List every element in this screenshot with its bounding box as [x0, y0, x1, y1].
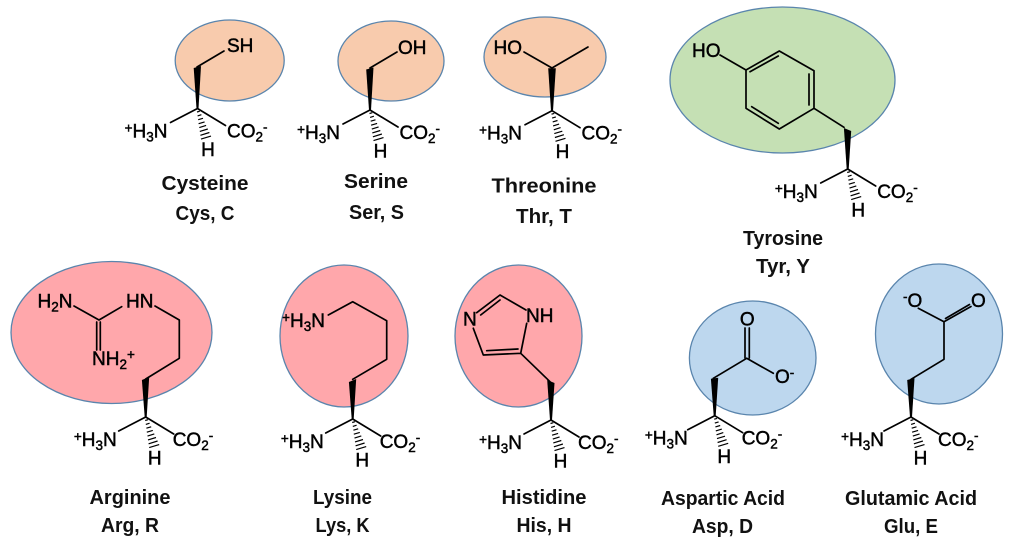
panel: aspartic acid [645, 301, 816, 538]
amino acid backbone: aspartic acid: + [645, 428, 653, 443]
side chain structure: serine: OH [398, 38, 426, 59]
side chain highlight: arginine [11, 262, 212, 404]
amino acid backbone: tyrosine: 2 [906, 190, 913, 205]
amino acid backbone: glutamic acid: - [974, 428, 979, 443]
name label: threonine: Thr, T [516, 206, 572, 228]
name label: cysteine [162, 173, 248, 225]
amino acid backbone: cysteine: 2 [256, 130, 263, 144]
side chain highlight: glutamic acid [876, 264, 1002, 404]
name label: serine [344, 171, 408, 224]
amino acid backbone: serine: H [374, 142, 387, 162]
amino acid backbone: aspartic acid [645, 378, 782, 468]
side chain highlight: lysine [280, 265, 408, 407]
side chain structure: arginine: HN [126, 292, 153, 312]
amino acid backbone: histidine [479, 380, 619, 472]
name label: threonine: Threonine [492, 176, 596, 198]
name label: threonine [492, 176, 596, 228]
side chain structure: lysine: H [290, 311, 304, 332]
amino acid backbone: tyrosine: N [804, 182, 818, 203]
amino acid backbone: lysine: + [281, 431, 289, 446]
side chain structure: arginine: + [127, 347, 135, 362]
panel: cysteine [125, 20, 284, 225]
amino acid backbone: histidine: 2 [606, 441, 614, 456]
amino acid backbone: lysine: H [355, 450, 369, 472]
amino acid backbone: tyrosine: CO [877, 182, 906, 203]
amino acid backbone: aspartic acid: 2 [770, 437, 778, 452]
amino acid backbone: arginine: H [148, 448, 162, 470]
name label: arginine: Arginine [90, 487, 170, 509]
amino acid backbone: cysteine: H [133, 122, 146, 142]
amino acid backbone: cysteine: H [201, 140, 215, 161]
side chain structure: lysine: N [311, 311, 325, 332]
name label: glutamic acid: Glu, E [884, 516, 938, 538]
side chain structure: arginine [38, 292, 179, 379]
side chain structure: threonine: HO [494, 38, 522, 59]
amino acid backbone: tyrosine: H [783, 182, 796, 203]
name label: lysine: Lysine [313, 487, 372, 509]
amino acid backbone: tyrosine: 3 [796, 190, 804, 205]
amino acid backbone: threonine: H [487, 124, 501, 145]
side chain structure: tyrosine [692, 41, 844, 129]
name label: serine: Ser, S [349, 202, 404, 224]
amino acid backbone: aspartic acid: 3 [666, 437, 674, 452]
name label: tyrosine [743, 228, 823, 278]
panel: glutamic acid [841, 264, 1002, 538]
amino acid backbone: serine: H [305, 123, 319, 144]
name label: tyrosine: Tyrosine [743, 228, 823, 250]
amino acid backbone: histidine: - [614, 431, 619, 446]
amino acid backbone: serine: 3 [319, 131, 326, 146]
name label: histidine: Histidine [502, 487, 586, 509]
side chain structure: cysteine [197, 36, 253, 67]
side chain structure: arginine: N [59, 292, 72, 312]
amino acid backbone: arginine [74, 377, 213, 470]
side chain structure: tyrosine: HO [692, 41, 720, 62]
name label: tyrosine: Tyr, Y [756, 256, 811, 278]
panel: threonine [479, 17, 622, 228]
amino acid backbone: histidine: H [487, 433, 501, 454]
panel: arginine [11, 262, 213, 537]
name label: arginine: Arg, R [101, 515, 160, 537]
amino acid backbone: serine [297, 68, 440, 162]
name label: cysteine: Cys, C [176, 203, 234, 225]
side chain structure: aspartic acid: O [775, 367, 790, 388]
side chain structure: glutamic acid [903, 289, 986, 379]
name label: histidine [502, 487, 586, 537]
amino acid backbone: arginine: 3 [95, 438, 103, 453]
amino acid backbone: aspartic acid: H [717, 447, 731, 468]
amino acid backbone: aspartic acid: N [674, 429, 688, 450]
amino acid backbone: threonine: CO [582, 124, 610, 145]
name label: aspartic acid: Asp, D [692, 516, 753, 538]
amino acid backbone: tyrosine: + [775, 181, 783, 196]
panel: serine [297, 21, 444, 224]
amino acid backbone: cysteine: + [125, 120, 133, 136]
side chain structure: aspartic acid [713, 310, 794, 388]
amino acid backbone: histidine: N [508, 433, 522, 454]
side chain structure: arginine: 2 [119, 357, 127, 372]
amino acid backbone: threonine: 2 [610, 132, 618, 147]
side chain highlight: threonine [484, 17, 606, 97]
amino acid backbone: cysteine: - [263, 120, 268, 134]
amino acid backbone: lysine: CO [380, 432, 408, 453]
side chain structure: cysteine: SH [227, 36, 253, 57]
amino acid backbone: arginine: - [209, 428, 213, 443]
panel: histidine [455, 265, 619, 537]
name label: lysine [313, 487, 372, 537]
amino acid backbone: threonine: + [479, 123, 487, 138]
amino acid backbone: arginine: H [82, 430, 95, 451]
panel: lysine [280, 265, 420, 537]
side chain structure: serine [370, 38, 426, 68]
side chain structure: lysine: + [282, 310, 290, 325]
side chain highlight: histidine [455, 265, 582, 407]
amino acid backbone: glutamic acid: N [870, 430, 884, 451]
amino acid backbone: aspartic acid: CO [742, 429, 770, 450]
amino acid backbone: threonine: - [618, 122, 622, 137]
amino acid backbone: lysine: H [289, 432, 302, 453]
amino acid backbone: glutamic acid [841, 378, 979, 470]
side chain structure: threonine [494, 38, 588, 68]
amino acid backbone: arginine: 2 [201, 438, 209, 453]
amino acid backbone: serine: 2 [428, 131, 436, 146]
amino acid backbone: glutamic acid: H [849, 430, 863, 451]
side chain highlight: tyrosine [670, 7, 895, 153]
side chain structure: arginine: H [38, 292, 51, 312]
amino acid backbone: threonine: N [508, 124, 522, 145]
amino acid backbone: arginine: N [103, 430, 117, 451]
amino acid backbone: histidine: 3 [501, 441, 508, 456]
amino acid backbone: histidine: CO [578, 433, 606, 454]
name label: glutamic acid: Glutamic Acid [845, 488, 977, 510]
amino acid backbone: lysine: N [310, 432, 324, 453]
side chain structure: arginine: 2 [51, 300, 59, 314]
amino acid backbone: glutamic acid: H [914, 448, 927, 470]
side chain structure: histidine: NH [526, 306, 553, 327]
side chain structure: arginine: NH [92, 349, 119, 370]
amino acid backbone: glutamic acid: 3 [863, 438, 870, 453]
side chain structure: glutamic acid: O [908, 291, 922, 312]
name label: histidine: His, H [516, 515, 572, 537]
amino acid backbone: threonine [479, 68, 622, 163]
amino acid backbone: lysine: - [416, 430, 420, 445]
name label: arginine [90, 487, 170, 537]
amino acid backbone: glutamic acid: + [841, 429, 849, 444]
amino acid backbone: histidine: H [554, 452, 567, 472]
amino acid backbone: aspartic acid: - [778, 427, 782, 442]
name label: glutamic acid [845, 488, 977, 538]
amino acid backbone: lysine: 3 [302, 440, 310, 455]
amino acid backbone: cysteine: CO [227, 122, 256, 142]
amino acid backbone: lysine: 2 [408, 440, 416, 455]
amino acid backbone: lysine [281, 379, 420, 472]
amino acid backbone: cysteine: N [154, 122, 168, 142]
name label: lysine: Lys, K [316, 515, 370, 537]
amino acid backbone: serine: - [436, 121, 440, 136]
amino acid backbone: serine: N [326, 123, 340, 144]
side chain structure: aspartic acid: O [740, 310, 755, 330]
side chain structure: histidine: N [463, 310, 477, 330]
side chain structure: lysine: 3 [304, 319, 311, 334]
amino acid backbone: arginine: + [74, 429, 82, 444]
name label: aspartic acid [661, 488, 785, 538]
amino acid backbone: tyrosine: - [913, 180, 918, 195]
side chain structure: glutamic acid: O [971, 291, 986, 312]
amino acid backbone: glutamic acid: 2 [966, 438, 974, 453]
side chain highlight: serine [338, 21, 444, 101]
amino acid backbone: serine: CO [400, 123, 428, 144]
amino acid backbone: serine: + [297, 122, 305, 137]
amino acid backbone: histidine: + [479, 432, 487, 447]
side chain structure: aspartic acid: - [790, 365, 794, 380]
panel: tyrosine [670, 7, 918, 278]
amino acid backbone: tyrosine: H [851, 200, 865, 222]
side chain structure: histidine [463, 295, 553, 382]
side chain highlight: cysteine [175, 20, 284, 101]
amino acid backbone: threonine: H [556, 142, 569, 163]
amino acid backbone: cysteine [125, 66, 268, 161]
side chain structure: glutamic acid: - [903, 289, 908, 304]
side chain structure: lysine [282, 302, 387, 379]
amino acid backbone: aspartic acid: H [653, 429, 666, 450]
name label: serine: Serine [344, 171, 408, 193]
name label: aspartic acid: Aspartic Acid [661, 488, 785, 510]
amino acid backbone: tyrosine [775, 128, 918, 222]
amino acid backbone: glutamic acid: CO [938, 430, 966, 451]
amino acid backbone: arginine: CO [173, 430, 201, 451]
name label: cysteine: Cysteine [162, 173, 248, 195]
side chain highlight: aspartic acid [689, 301, 816, 415]
amino acid backbone: threonine: 3 [501, 132, 508, 147]
amino acid backbone: cysteine: 3 [146, 130, 154, 144]
